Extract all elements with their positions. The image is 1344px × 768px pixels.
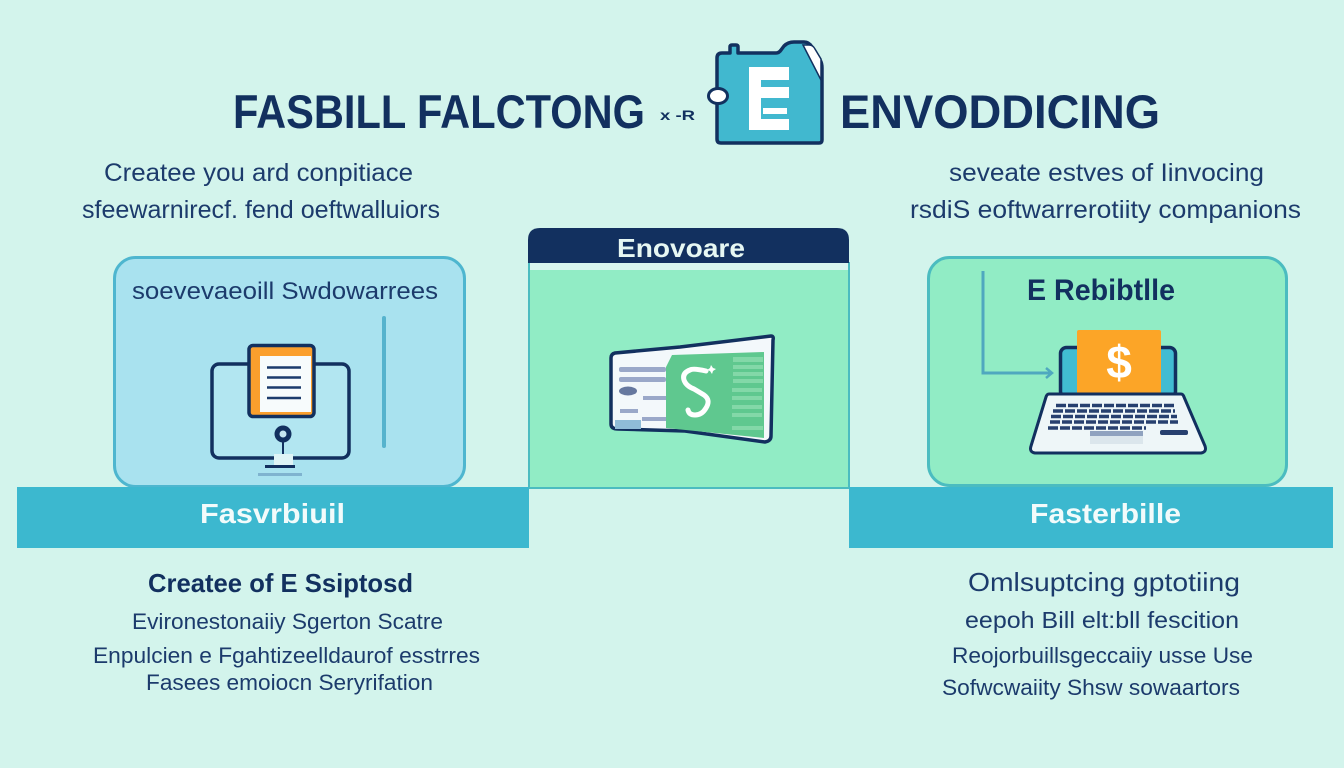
left bottom text block xyxy=(93,568,480,695)
left intro text: Createe you ard conpitiace xyxy=(104,159,413,187)
right bottom text block: Omlsuptcing gptotiing xyxy=(968,567,1240,597)
center panel header xyxy=(528,228,849,263)
left bottom text block: Fasees emoiocn Seryrifation xyxy=(146,670,433,695)
right intro text xyxy=(910,159,1301,224)
panel: left software xyxy=(114,258,464,486)
title: FASBILL FALCTONG xyxy=(233,85,645,138)
left intro text xyxy=(82,159,440,224)
title: ENVODDICING xyxy=(840,85,1160,138)
right bottom text block: eepoh Bill elt:bll fescition xyxy=(965,607,1239,633)
right bottom text block: Reojorbuillsgeccaiiy usse Use xyxy=(952,643,1253,668)
vertical connector line xyxy=(382,318,386,446)
left bottom text block: Createe of E Ssiptosd xyxy=(148,568,413,598)
panel: right rebill xyxy=(928,258,1286,486)
band: left Fasvrbiuil xyxy=(17,487,529,548)
right bottom text block xyxy=(942,567,1253,700)
band: right Fasterbille xyxy=(849,487,1333,548)
arrow: elbow connector xyxy=(983,271,1052,378)
band: right Fasterbille: Fasterbille xyxy=(1030,498,1181,529)
left panel heading: soevevaeoill Swdowarrees xyxy=(132,278,438,305)
right bottom text block: Sofwcwaiity Shsw sowaartors xyxy=(942,675,1240,700)
panel: center Enovoare xyxy=(528,228,849,488)
right intro text: seveate estves of Iinvocing xyxy=(949,159,1264,187)
band: left Fasvrbiuil: Fasvrbiuil xyxy=(200,498,345,529)
title xyxy=(233,85,1160,138)
center panel heading: Enovoare xyxy=(617,233,745,263)
right panel heading: E Rebibtlle xyxy=(1027,274,1175,307)
icon: laptop with dollar card xyxy=(1030,330,1206,453)
icon: wallet with dollar xyxy=(611,336,773,442)
icon: E document logo xyxy=(708,42,822,143)
title: x -R xyxy=(660,107,695,123)
right intro text: rsdiS eoftwarrerotiity companions xyxy=(910,196,1301,224)
left intro text: sfeewarnirecf. fend oeftwalluiors xyxy=(82,196,440,224)
icon: monitor with document xyxy=(212,346,349,476)
icon: laptop with dollar card: $ xyxy=(1106,336,1132,388)
left bottom text block: Enpulcien e Fgahtizeelldaurof esstrres xyxy=(93,643,480,668)
left bottom text block: Evironestonaiiy Sgerton Scatre xyxy=(132,609,443,634)
